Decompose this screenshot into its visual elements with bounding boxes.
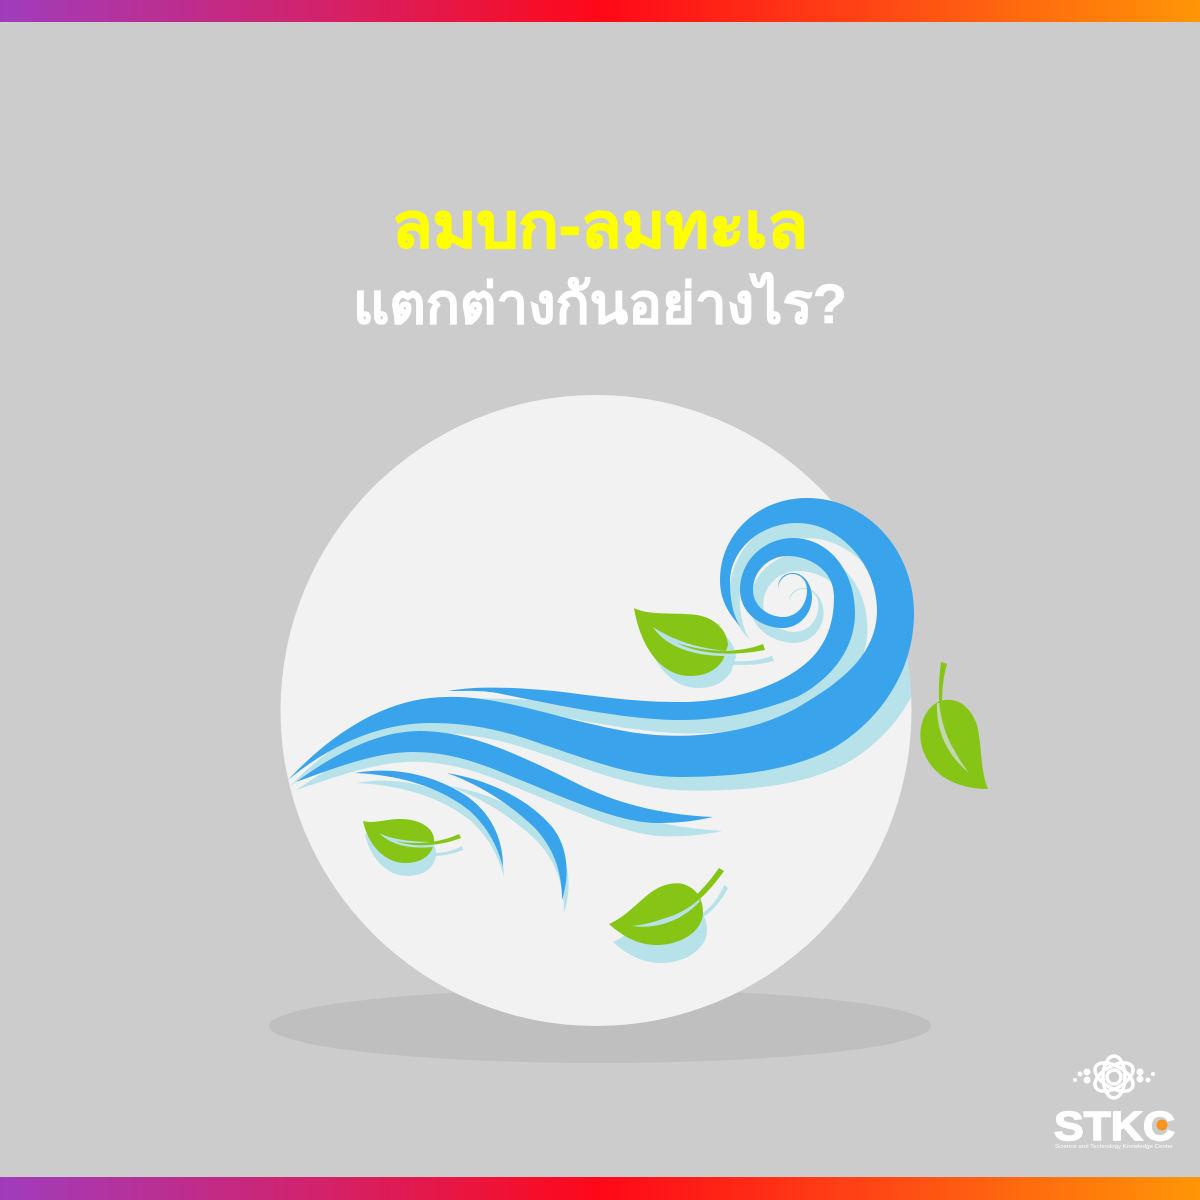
wind light shadow layer xyxy=(288,506,928,913)
logo: STKC xyxy=(1054,1056,1175,1150)
icon: leaf bottom xyxy=(609,868,728,963)
title line 1: ลมบก-ลมทะเล xyxy=(392,192,808,261)
logo dots xyxy=(1073,1068,1155,1084)
ground shadow xyxy=(269,989,931,1063)
icon: leaf right xyxy=(920,662,988,789)
logo wordmark: STKC xyxy=(1054,1103,1175,1149)
title line 2: แตกต่างกันอย่างไร? xyxy=(353,271,847,335)
wind blade left xyxy=(355,771,503,867)
logo tagline: Science and Technology Knowledge Center xyxy=(1055,1144,1173,1150)
logo atom icon xyxy=(1090,1056,1138,1098)
title xyxy=(353,192,847,335)
big wind swirl xyxy=(288,498,914,780)
wind blue strokes xyxy=(288,498,914,900)
white circle xyxy=(280,395,912,1026)
lower wind stream xyxy=(296,731,713,823)
logo orange dot xyxy=(1156,1120,1168,1130)
bottom gradient bar xyxy=(0,1177,1200,1200)
top gradient bar xyxy=(0,0,1200,22)
icon: leaf lower left xyxy=(363,819,463,876)
inner wind swirl xyxy=(448,538,855,720)
wind blade right xyxy=(447,773,567,900)
icon: leaf top xyxy=(634,608,774,688)
